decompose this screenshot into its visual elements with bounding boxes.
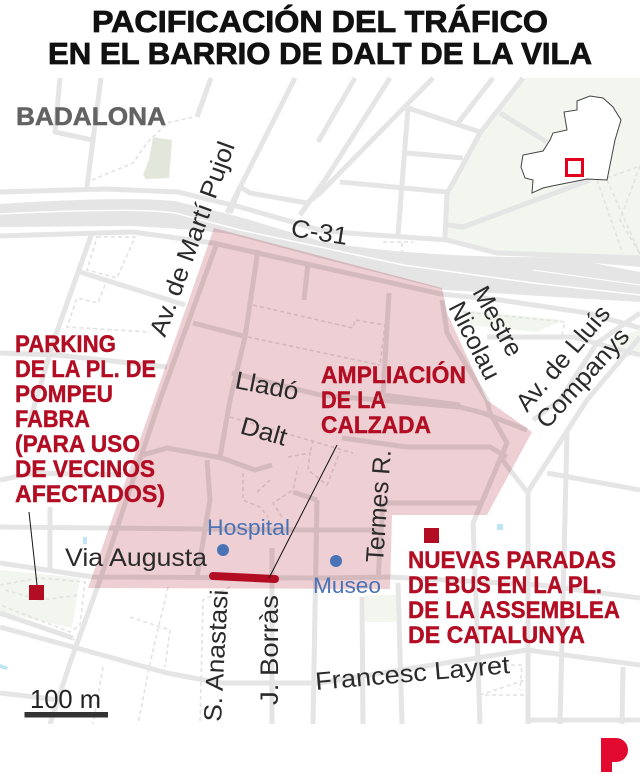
callout: new bus stops	[408, 528, 620, 649]
street labels	[65, 138, 635, 722]
street labels: Francesc Layret	[314, 651, 511, 696]
street labels: S. Anastasi	[199, 589, 234, 722]
street labels: Dalt	[237, 412, 290, 452]
street labels: Companys	[531, 322, 635, 434]
callout: road widening: CALZADA	[321, 412, 431, 439]
callout: new bus stops: NUEVAS PARADAS	[408, 547, 616, 574]
street labels: Av. de Lluís	[510, 300, 616, 417]
place label: Badalona: BADALONA	[16, 103, 166, 131]
street labels: C-31	[289, 214, 350, 251]
point of interest: Museo	[313, 555, 381, 598]
callout: new bus stops: DE BUS EN LA PL.	[408, 572, 602, 599]
title: EN EL BARRIO DE DALT DE LA VILA	[48, 36, 592, 71]
title: PACIFICACIÓN DEL TRÁFICO	[92, 3, 548, 39]
callout: road widening	[213, 361, 466, 579]
callout: new bus stops: DE LA ASSEMBLEA	[408, 597, 620, 624]
white cover under the map	[0, 724, 640, 784]
point of interest: Hospital: Hospital	[207, 515, 290, 540]
point of interest: Hospital	[207, 515, 290, 556]
street labels: J. Borràs	[256, 595, 284, 705]
callout: new bus stops: DE CATALUNYA	[408, 622, 585, 649]
callout: road widening: DE LA	[321, 387, 386, 414]
street labels: Via Augusta	[65, 544, 207, 572]
footpaths	[0, 117, 640, 724]
callout: parking: FABRA	[15, 406, 90, 433]
callout: road widening: AMPLIACIÓN	[321, 361, 466, 389]
street labels: Nicolau	[443, 297, 506, 385]
callout: parking: DE LA PL. DE	[15, 356, 156, 383]
callout: parking: AFECTADOS)	[15, 481, 165, 508]
street labels: Lladó	[233, 366, 301, 406]
scale bar: 100 m	[30, 684, 101, 714]
green areas	[0, 78, 640, 628]
callout: parking: DE VECINOS	[15, 456, 155, 483]
C-31 highway	[0, 199, 640, 302]
locator map	[521, 96, 621, 193]
street labels: Termes R.	[361, 449, 397, 563]
callout: parking: POMPEU	[15, 381, 113, 408]
street labels: Av. de Martí Pujol	[144, 138, 241, 340]
title	[48, 3, 592, 71]
callout: parking: PARKING	[15, 331, 116, 358]
highlighted zone: Dalt de la Vila	[88, 228, 532, 589]
street labels: Mestre	[467, 281, 528, 361]
callout: parking: (PARA USO	[15, 431, 140, 458]
callout: parking	[15, 331, 165, 600]
logo	[601, 738, 628, 772]
point of interest: Museo: Museo	[313, 573, 381, 598]
water	[0, 524, 503, 670]
